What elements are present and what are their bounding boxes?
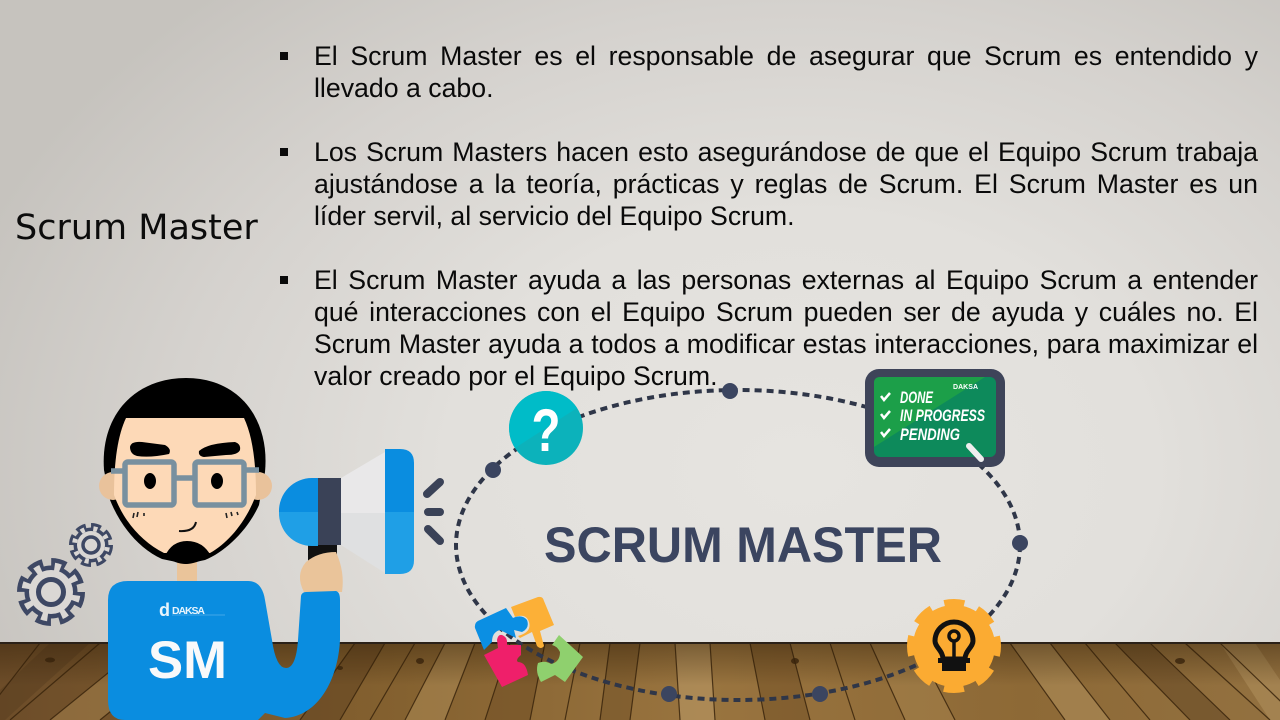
megaphone xyxy=(279,449,414,574)
small gear xyxy=(72,526,110,564)
puzzle piece: pink xyxy=(484,635,528,687)
icon: task chalkboard: IN PROGRESS xyxy=(900,406,985,425)
ears xyxy=(99,472,272,500)
face xyxy=(114,418,256,553)
hair and beard outline xyxy=(104,378,266,564)
icon: small gears xyxy=(21,526,110,622)
bullet 3 line 1: El Scrum Master ayuda a las personas externas al Equipo Scrum a entender xyxy=(314,265,1258,295)
large gear xyxy=(21,562,81,622)
title: Scrum Master xyxy=(15,208,258,248)
shirt initials: SM xyxy=(148,631,227,690)
dashed ring xyxy=(456,383,1028,702)
ring heading: SCRUM MASTER xyxy=(544,517,942,573)
bullet 3 line 2: qué interacciones con el Equipo Scrum pueden ser de ayuda y cuáles no. El xyxy=(314,297,1258,327)
puzzle piece: green xyxy=(537,635,583,682)
floor xyxy=(0,642,1280,720)
icon: task chalkboard: PENDING xyxy=(900,425,960,444)
bullet 2 line 2: ajustándose a la teoría, prácticas y reglas de Scrum. El Scrum Master es un xyxy=(314,169,1258,199)
sound waves xyxy=(427,482,440,541)
bullet 3 line 3: Scrum Master ayuda a todos a modificar estas interacciones, para maximizar el xyxy=(314,329,1258,359)
bullet 2 line 1: Los Scrum Masters hacen esto asegurándose de que el Equipo Scrum trabaja xyxy=(314,137,1258,167)
eyebrows xyxy=(130,442,170,457)
puzzle piece: blue xyxy=(475,608,528,650)
shirt logo: d xyxy=(159,600,170,620)
character: scrum master xyxy=(99,378,440,720)
shirt logo xyxy=(159,600,225,620)
megaphone handle xyxy=(308,544,337,566)
blue shirt xyxy=(108,581,340,720)
goatee xyxy=(165,541,211,564)
icon: lightbulb gear xyxy=(911,603,997,689)
bullet 3 marker xyxy=(280,276,288,284)
neck xyxy=(177,555,197,585)
icon: task chalkboard: DAKSA xyxy=(953,384,978,391)
eyes xyxy=(144,473,223,489)
freckles xyxy=(133,512,238,518)
hand xyxy=(300,552,343,592)
icon: task chalkboard: DONE xyxy=(900,388,933,407)
icon: question mark: ? xyxy=(532,397,560,464)
puzzle piece: orange xyxy=(511,597,554,648)
bullet 2 line 3: líder servil, al servicio del Equipo Scrum. xyxy=(314,201,795,231)
shirt logo: DAKSA xyxy=(172,605,205,617)
bullet 1 marker xyxy=(280,52,288,60)
bullet 2 marker xyxy=(280,148,288,156)
bullet 1 line 1: El Scrum Master es el responsable de asegurar que Scrum es entendido y xyxy=(314,41,1258,71)
bullet 3 line 4: valor creado por el Equipo Scrum. xyxy=(314,361,717,391)
glasses xyxy=(111,462,259,505)
smile xyxy=(179,522,196,531)
icon: task chalkboard xyxy=(865,369,1005,467)
ring node dots xyxy=(485,383,1028,702)
bullet list xyxy=(280,41,1258,391)
bullet 1 line 2: llevado a cabo. xyxy=(314,73,494,103)
icon: question mark xyxy=(509,391,583,465)
icon: puzzle pieces xyxy=(475,597,583,687)
